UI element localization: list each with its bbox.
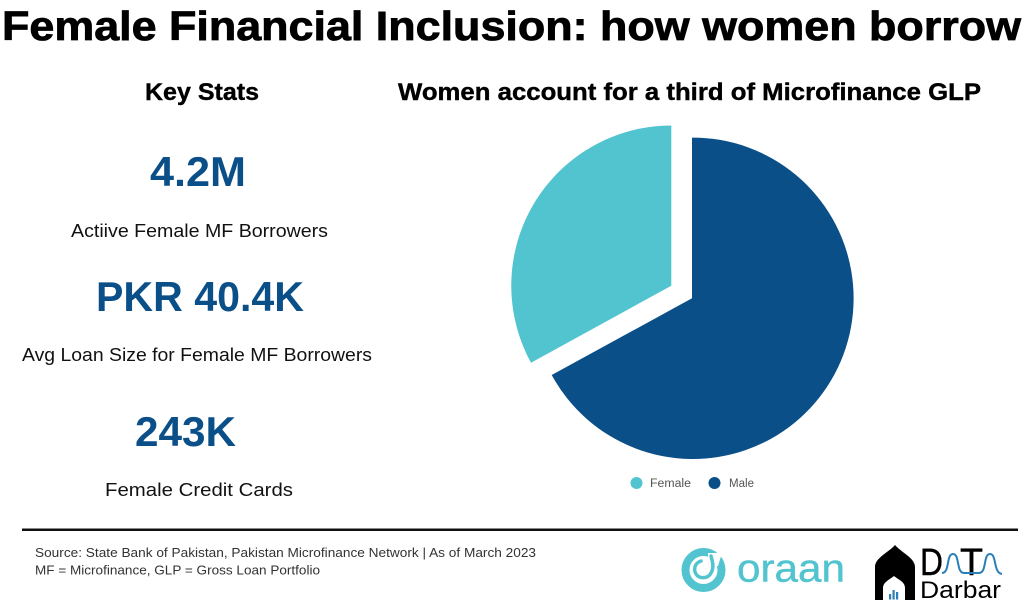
- pie slice: male: [552, 138, 854, 459]
- pie slice: female: [511, 126, 671, 363]
- legend: Male: [729, 478, 754, 490]
- stat: active female borrowers: Actiive Female MF Borrowers: [71, 221, 328, 241]
- stat: female credit cards: Female Credit Cards: [105, 480, 293, 500]
- stat: average loan size: Avg Loan Size for Female MF Borrowers: [22, 345, 372, 365]
- stat: average loan size: [22, 273, 372, 365]
- logo: data darbar: T: [960, 542, 983, 584]
- logo: oraan: [686, 548, 845, 590]
- stat: active female borrowers: 4.2M: [150, 148, 246, 195]
- logo: data darbar: D: [920, 542, 943, 584]
- panel: key stats: [22, 79, 372, 500]
- chart heading: Women account for a third of Microfinance GLP: [398, 79, 981, 106]
- stat: active female borrowers: [71, 148, 328, 241]
- heading: key stats: Key Stats: [145, 79, 259, 106]
- logo: oraan: oraan: [737, 548, 845, 590]
- source note: MF = Microfinance, GLP = Gross Loan Portfolio: [35, 562, 320, 578]
- footer rule: [22, 528, 1018, 531]
- legend: Female: [650, 478, 691, 490]
- source note: Source: State Bank of Pakistan, Pakistan Microfinance Network | As of March 2023: [35, 545, 536, 560]
- stat: average loan size: PKR 40.4K: [96, 273, 304, 320]
- panel: pie chart: [398, 79, 981, 490]
- title: Female Financial Inclusion: how women borrow: [2, 3, 1021, 49]
- stat: female credit cards: 243K: [135, 408, 236, 455]
- logo: data darbar: [875, 542, 1002, 602]
- legend: [630, 477, 754, 490]
- stat: female credit cards: [105, 408, 293, 500]
- source note: [35, 545, 536, 578]
- icon: mosque dome: [875, 545, 915, 600]
